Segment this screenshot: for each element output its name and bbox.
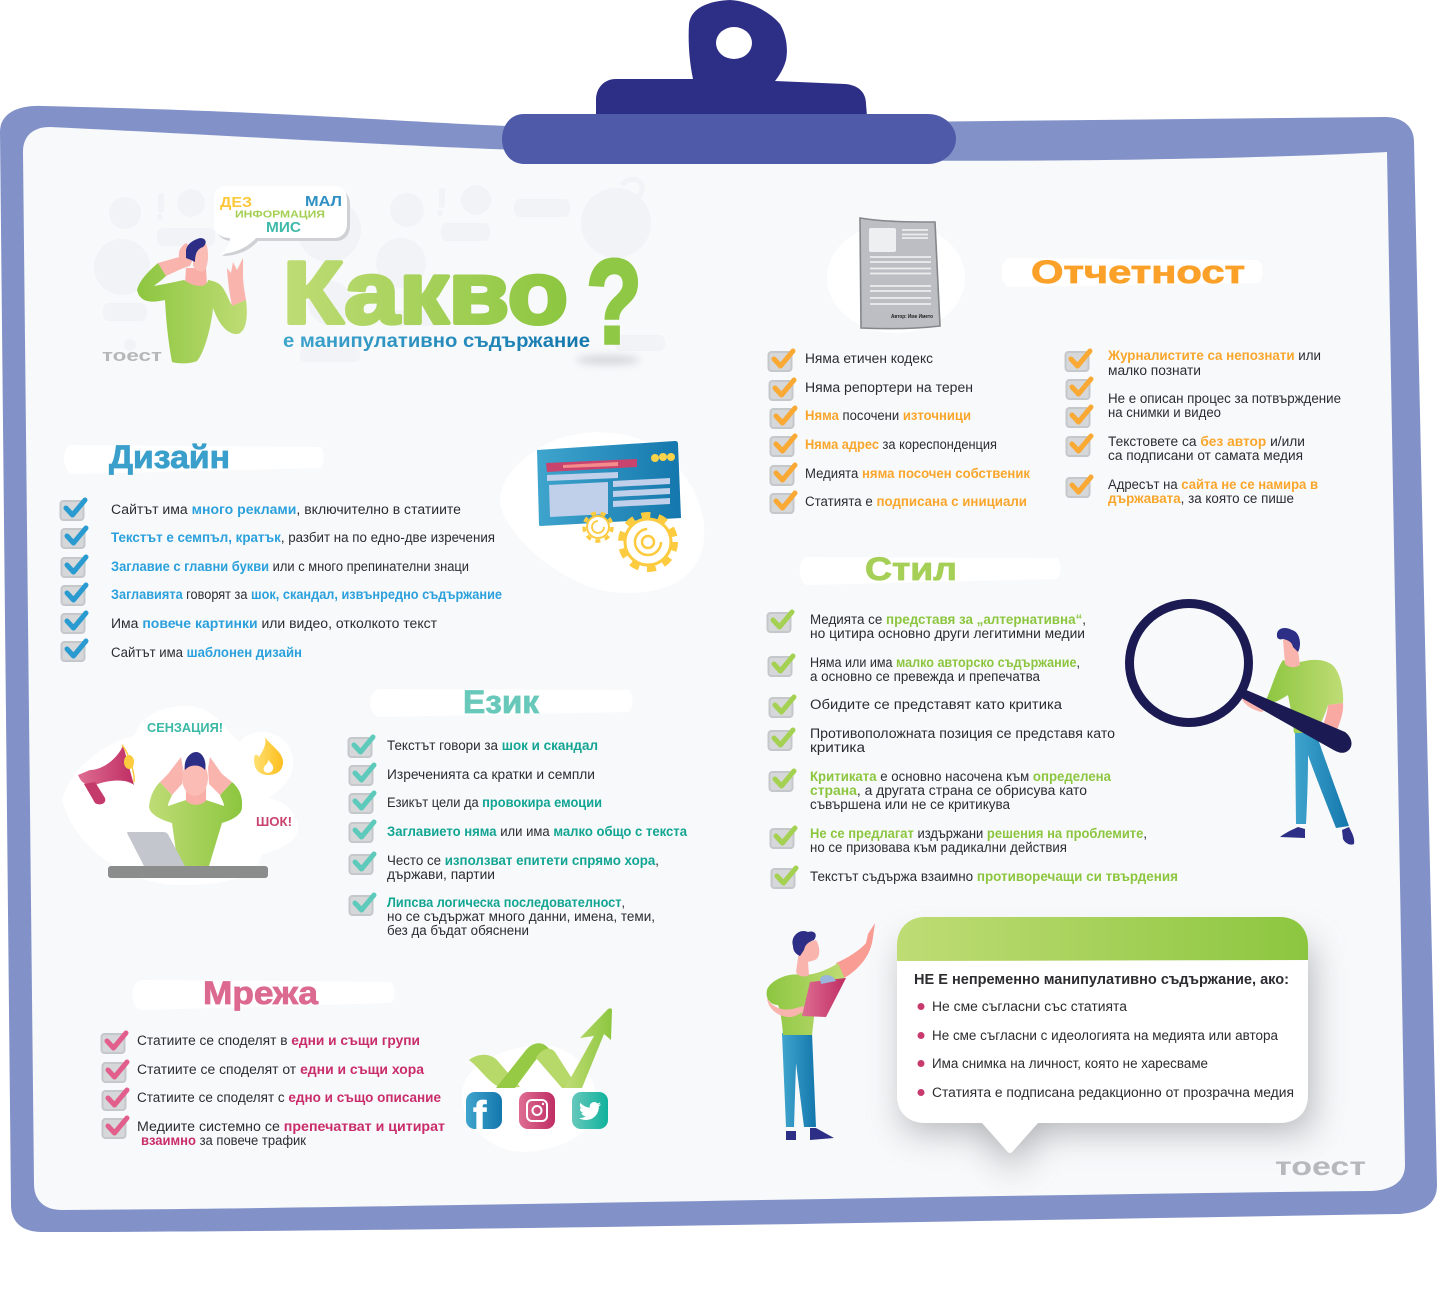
panel: Дизайн — [60, 439, 502, 661]
checklist row: Няма адрес за кореспонденция — [805, 437, 997, 452]
checklist row: Медията се представя за „алтернативна“, — [810, 612, 1086, 627]
checklist row: критика — [810, 740, 866, 755]
checklist row — [768, 612, 1086, 641]
icon: instagram — [519, 1092, 555, 1129]
checklist row — [60, 500, 461, 520]
logo bottom right: тоест — [1275, 1151, 1366, 1181]
checklist row: Липсва логическа последователност, — [387, 895, 625, 910]
checklist row — [770, 465, 1030, 485]
checklist row: Обидите се представят като критика — [810, 697, 1063, 712]
checklist row: Няма посочени източници — [805, 408, 971, 423]
checklist row: Не се предлагат издържани решения на проблемите, — [810, 826, 1147, 841]
label: шок: ШОК! — [256, 814, 292, 829]
illustration: document — [827, 218, 965, 333]
checklist row: Езикът цели да провокира емоции — [387, 795, 602, 810]
checklist row — [770, 697, 1063, 717]
checklist row: държавата, за която се пише — [1108, 491, 1294, 506]
checklist row: страна, а другата страна се обрисува като — [810, 783, 1087, 798]
icon: facebook — [466, 1092, 502, 1138]
checklist row: съвършена или не се критикува — [810, 797, 1010, 812]
checklist row — [348, 737, 598, 757]
background speech bubbles pattern — [94, 179, 665, 362]
checklist row: Няма репортери на терен — [805, 380, 973, 395]
checklist row: Статията е подписана с инициали — [805, 494, 1027, 509]
checklist row — [770, 408, 971, 428]
callout heading: НЕ Е непременно манипулативно съдържание, ако: — [914, 972, 1289, 988]
checklist row — [350, 765, 595, 785]
checklist row: Текстът е семпъл, кратък, разбит на по едно-две изречения — [111, 530, 495, 545]
checklist row — [102, 1090, 441, 1110]
panel: Мрежа — [102, 975, 445, 1148]
checklist row — [102, 1033, 420, 1053]
bullet item: Има снимка на личност, която не харесваме — [932, 1056, 1208, 1071]
checklist row — [770, 493, 1027, 513]
icon: flame — [254, 737, 283, 775]
checklist row: Не е описан процес за потвърждение — [1108, 391, 1341, 406]
checklist row: Адресът на сайта не се намира в — [1108, 477, 1318, 492]
checklist row: Текстът съдържа взаимно противоречащи си твърдения — [810, 869, 1178, 884]
checklist row — [350, 822, 687, 842]
checklist row: Статиите се споделят с едно и също описание — [137, 1090, 441, 1105]
title: Какво? — [283, 235, 642, 369]
heading: Дизайн — [64, 439, 324, 475]
heading: Мрежа — [132, 975, 394, 1011]
panel: Стил — [768, 551, 1178, 888]
illustration: social media growth — [462, 1008, 612, 1152]
checklist row: взаимно за повече трафик — [141, 1133, 306, 1148]
checklist row: Заглавието няма или има малко общо с текста — [387, 824, 687, 839]
checklist row: Медиите системно се препечатват и цитират — [137, 1119, 445, 1134]
checklist row: Заглавие с главни букви или с много препинателни знаци — [111, 559, 469, 574]
checklist row — [102, 1062, 424, 1082]
callout: not necessarily manipulative — [897, 917, 1310, 1170]
checklist row: Сайтът има шаблонен дизайн — [111, 645, 302, 660]
clipboard clip — [502, 0, 956, 164]
checklist row — [62, 613, 437, 633]
checklist row: Журналистите са непознати или — [1107, 348, 1321, 363]
checklist row: на снимки и видео — [1108, 405, 1221, 420]
illustration: stressed person with megaphone — [62, 706, 298, 885]
checklist row — [62, 585, 502, 605]
illustration: website and gears — [500, 432, 704, 593]
checklist row: но цитира основно други легитимни медии — [810, 626, 1085, 641]
checklist row: Изреченията са кратки и семпли — [387, 767, 595, 782]
speech bubble: дез мал мис информация: ДЕЗ — [220, 195, 252, 211]
illustration: document: Автор: Име Името — [891, 314, 933, 320]
title: Какво?: Какво — [283, 243, 568, 342]
checklist row: но се призовава към радикални действия — [810, 840, 1067, 855]
checklist row: Сайтът има много реклами , включително в статиите — [111, 502, 461, 517]
heading: Език: Език — [463, 684, 540, 720]
checklist row: са подписани от самата медия — [1108, 448, 1303, 463]
checklist row — [772, 868, 1178, 888]
heading: Мрежа: Мрежа — [203, 975, 318, 1011]
title: Какво?: ? — [586, 235, 642, 369]
checklist row: Заглавията говорят за шок, скандал, извънредно съдържание — [111, 587, 502, 602]
checklist row: Критиката е основно насочена към определена — [810, 769, 1111, 784]
checklist row — [1066, 391, 1341, 427]
bullet item: Не сме съгласни с идеологията на медията или автора — [932, 1028, 1278, 1043]
heading: Отчетност — [1002, 254, 1262, 290]
laptop and desk — [108, 832, 268, 878]
checklist row — [768, 655, 1080, 684]
logo: тоест — [102, 346, 162, 365]
person — [149, 752, 242, 866]
checklist row — [768, 726, 1115, 755]
checklist row — [770, 380, 973, 400]
heading: Стил — [800, 551, 1060, 587]
checklist row: Текстът говори за шок и скандал — [387, 738, 598, 753]
bullet item: Статията е подписана редакционно от прозрачна медия — [932, 1085, 1294, 1100]
checklist row — [62, 557, 469, 577]
checklist row — [1066, 477, 1318, 506]
checklist row — [350, 853, 659, 882]
heading: Стил: Стил — [865, 551, 957, 587]
icon: facebook: f — [473, 1094, 487, 1138]
panel: Език — [348, 684, 687, 938]
checklist row — [102, 1118, 445, 1148]
checklist row — [770, 826, 1147, 855]
checklist row — [1066, 434, 1305, 463]
checklist row: а основно се превежда и препечатва — [810, 669, 1040, 684]
checklist row: Статиите се споделят в едни и същи групи — [137, 1033, 420, 1048]
icon: megaphone — [78, 745, 134, 804]
checklist row — [62, 528, 495, 548]
checklist row: Текстовете са без автор и/или — [1108, 434, 1305, 449]
checklist row — [770, 769, 1111, 812]
speech bubble: дез мал мис информация: МАЛ — [305, 194, 342, 210]
checklist row: Няма етичен кодекс — [805, 351, 933, 366]
checklist icon — [1066, 379, 1091, 399]
heading: Дизайн: Дизайн — [109, 439, 230, 475]
checklist row: малко познати — [1108, 363, 1201, 378]
checklist row: Няма или има малко авторско съдържание, — [810, 655, 1080, 670]
checklist row — [350, 895, 655, 938]
checklist row: без да бъдат обяснени — [387, 923, 529, 938]
panel: Отчетност — [768, 254, 1341, 513]
person thinking illustration — [137, 238, 247, 363]
bullet item: Не сме съгласни със статията — [932, 999, 1127, 1014]
checklist row — [1066, 348, 1321, 378]
checklist row: държави, партии — [387, 867, 495, 882]
speech bubble: дез мал мис информация — [214, 186, 350, 256]
icon: twitter — [572, 1092, 608, 1129]
illustration: person pointing up — [767, 923, 875, 1140]
checklist row — [350, 793, 602, 813]
checklist row — [770, 436, 997, 456]
label: сензация: СЕНЗАЦИЯ! — [147, 720, 223, 735]
checklist row: Противоположната позиция се представя като — [810, 726, 1115, 741]
checklist row: Има повече картинки или видео, отколкото текст — [111, 616, 437, 631]
checklist row — [768, 351, 933, 371]
checklist row: Статиите се споделят от едни и същи хора — [137, 1062, 424, 1077]
chart arrow — [469, 1008, 612, 1088]
checklist row — [62, 641, 302, 661]
title: Какво?: е манипулативно съдържание — [283, 330, 590, 352]
heading: Език — [370, 684, 632, 720]
speech bubble: дез мал мис информация: МИС — [266, 220, 302, 236]
speech bubble: дез мал мис информация: ИНФОРМАЦИЯ — [235, 210, 325, 220]
illustration: person with magnifier — [1130, 604, 1354, 845]
heading: Отчетност: Отчетност — [1031, 254, 1245, 290]
checklist row: Често се използват епитети спрямо хора, — [387, 853, 659, 868]
checklist row: Медията няма посочен собственик — [805, 466, 1030, 481]
checklist row: но се съдържат много данни, имена, теми, — [387, 909, 655, 924]
